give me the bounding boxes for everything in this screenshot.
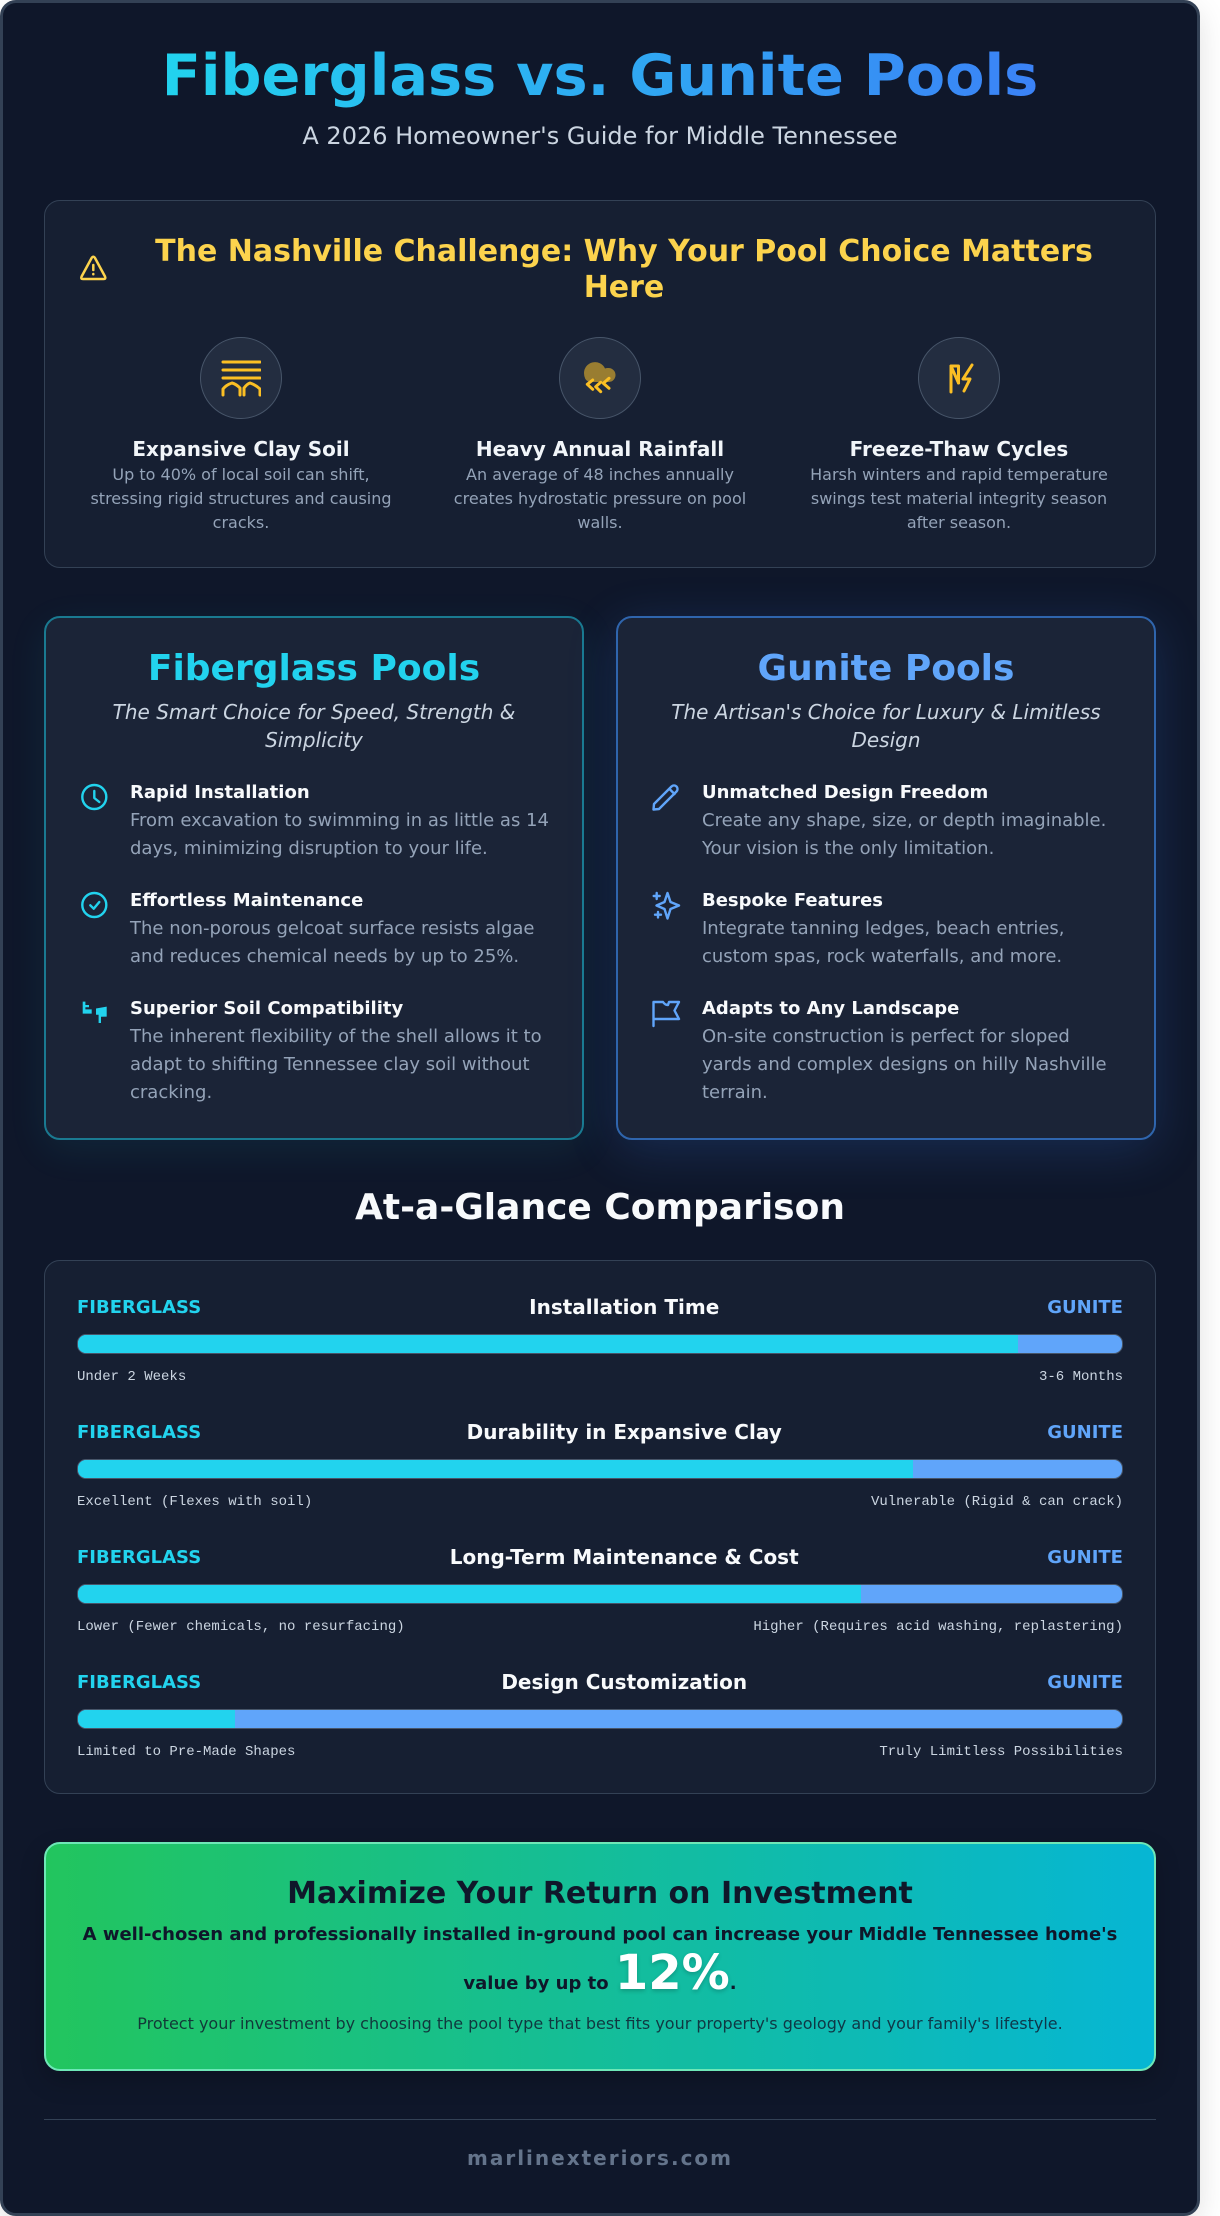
callout heading: Maximize Your Return on Investment <box>287 1876 913 1911</box>
feature: soil compatibility <box>82 998 542 1103</box>
icon: rain cloud <box>559 337 641 419</box>
icon: freeze-thaw <box>918 337 1000 419</box>
challenge heading: The Nashville Challenge: Why Your Pool Choice Matters Here <box>155 234 1093 305</box>
row labels: Design Customization <box>501 1670 747 1694</box>
row captions: Limited to Pre-Made Shapes <box>77 1744 295 1760</box>
text: freeze-thaw: Harsh winters and rapid temperature <box>810 465 1108 484</box>
text: clay soil: Up to 40% of local soil can shift, <box>112 465 370 484</box>
heading: freeze-thaw: Freeze-Thaw Cycles <box>850 437 1068 461</box>
row labels: Durability in Expansive Clay <box>467 1420 782 1444</box>
row captions <box>77 1369 1123 1385</box>
fiberglass heading: Fiberglass Pools <box>148 648 480 689</box>
feature text: terrain. <box>702 1082 768 1103</box>
row captions: Under 2 Weeks <box>77 1369 186 1385</box>
comparison heading: At-a-Glance Comparison <box>355 1187 845 1228</box>
row labels: FIBERGLASS <box>77 1672 201 1692</box>
bar: 75 percent fiberglass <box>77 1584 1123 1604</box>
row: maintenance and cost <box>77 1545 1123 1635</box>
feature title: Rapid Installation <box>130 782 310 803</box>
row labels <box>77 1420 1123 1444</box>
row labels <box>77 1295 1123 1319</box>
row labels: Installation Time <box>529 1295 719 1319</box>
icon: sparkles <box>652 892 680 920</box>
icon: clay soil <box>200 337 282 419</box>
footer website: marlinexteriors.com <box>467 2146 733 2170</box>
icon: split signs <box>82 1002 107 1023</box>
panel: fiberglass pools <box>44 616 584 1140</box>
heading: rainfall: Heavy Annual Rainfall <box>476 437 724 461</box>
panel: gunite pools <box>616 616 1156 1140</box>
callout: return on investment <box>44 1842 1156 2071</box>
feature: adapts to landscape <box>652 998 1107 1103</box>
panel: the Nashville challenge <box>44 200 1156 568</box>
bar: 15 percent fiberglass <box>77 1709 1123 1729</box>
gunite heading: Gunite Pools <box>758 648 1014 689</box>
fiberglass tagline: The Smart Choice for Speed, Strength & Simplicity <box>113 700 515 752</box>
feature title: Bespoke Features <box>702 890 883 911</box>
icon: pencil <box>652 784 679 811</box>
row labels: Long-Term Maintenance & Cost <box>450 1545 799 1569</box>
text: freeze-thaw: after season. <box>907 513 1011 532</box>
row captions: Higher (Requires acid washing, replastering) <box>753 1619 1123 1635</box>
challenge: expansive clay soil <box>90 337 392 532</box>
feature text: The non-porous gelcoat surface resists algae and reduces chemical needs by up to 25%. <box>130 918 535 967</box>
feature: bespoke features <box>652 890 1065 967</box>
row: durability <box>77 1420 1123 1510</box>
row labels: GUNITE <box>1047 1546 1123 1568</box>
gunite tagline: The Artisan's Choice for Luxury & Limitless Design <box>671 700 1101 752</box>
feature: design freedom <box>652 782 1106 859</box>
text: rainfall: An average of 48 inches annually <box>466 465 734 484</box>
bar: 90 percent fiberglass <box>77 1334 1123 1354</box>
callout statement with 12 percent <box>82 1924 1117 2001</box>
callout statement with 12 percent: value by up to 12%. <box>463 1945 737 2001</box>
feature: rapid installation <box>81 782 549 859</box>
bar: 80 percent fiberglass <box>77 1459 1123 1479</box>
row captions: 3-6 Months <box>1039 1369 1123 1385</box>
text: freeze-thaw: swings test material integrity season <box>811 489 1107 508</box>
row captions <box>77 1494 1123 1510</box>
row: design customization <box>77 1670 1123 1760</box>
text: rainfall <box>454 465 746 532</box>
text: clay soil: stressing rigid structures and causing <box>90 489 392 508</box>
row labels: FIBERGLASS <box>77 1422 201 1442</box>
row labels <box>77 1670 1123 1694</box>
feature text: From excavation to swimming in as little as 14 days, minimizing disruption to your life. <box>130 810 549 859</box>
row captions <box>77 1744 1123 1760</box>
feature text: Create any shape, size, or depth imaginable. Your vision is the only limitation. <box>702 810 1106 859</box>
feature text <box>702 1026 1107 1103</box>
feature title: Unmatched Design Freedom <box>702 782 988 803</box>
feature title: Effortless Maintenance <box>130 890 363 911</box>
row: installation time <box>77 1295 1123 1385</box>
row labels: GUNITE <box>1047 1422 1123 1442</box>
text: rainfall: creates hydrostatic pressure on pool <box>454 489 746 508</box>
feature text: Integrate tanning ledges, beach entries, custom spas, rock waterfalls, and more. <box>702 918 1065 967</box>
callout statement with 12 percent: A well-chosen and professionally installed in-ground pool can increase your Middle Tennessee home's <box>83 1924 1117 1945</box>
challenge: freeze-thaw <box>810 337 1108 532</box>
row captions: Lower (Fewer chemicals, no resurfacing) <box>77 1619 405 1635</box>
row captions: Excellent (Flexes with soil) <box>77 1494 312 1510</box>
heading: clay soil: Expansive Clay Soil <box>132 437 350 461</box>
icon: flag <box>652 1000 680 1028</box>
row labels: GUNITE <box>1047 1672 1123 1692</box>
row captions: Truly Limitless Possibilities <box>879 1744 1123 1760</box>
text: freeze-thaw <box>810 465 1108 532</box>
text: rainfall: walls. <box>577 513 623 532</box>
icon: check circle <box>81 892 108 918</box>
row labels: FIBERGLASS <box>77 1546 201 1568</box>
challenge: heavy rainfall <box>454 337 746 532</box>
text: clay soil <box>90 465 392 532</box>
feature text: On-site construction is perfect for sloped <box>702 1026 1070 1047</box>
text: clay soil: cracks. <box>213 513 269 532</box>
feature text: The inherent flexibility of the shell allows it to adapt to shifting Tennessee clay soil without cracking. <box>130 1026 542 1103</box>
row captions <box>77 1619 1123 1635</box>
title: Fiberglass vs. Gunite Pools <box>162 42 1038 109</box>
panel: comparison chart <box>44 1260 1156 1794</box>
row labels <box>77 1545 1123 1569</box>
icon: warning triangle <box>80 256 107 280</box>
row labels: GUNITE <box>1047 1296 1123 1318</box>
feature title: Superior Soil Compatibility <box>130 998 403 1019</box>
subtitle: A 2026 Homeowner's Guide for Middle Tennessee <box>302 122 898 150</box>
row captions: Vulnerable (Rigid & can crack) <box>871 1494 1123 1510</box>
icon: clock <box>81 784 108 810</box>
feature title: Adapts to Any Landscape <box>702 998 959 1019</box>
feature text: yards and complex designs on hilly Nashville <box>702 1054 1107 1075</box>
feature: effortless maintenance <box>81 890 535 967</box>
callout note: Protect your investment by choosing the pool type that best fits your property's geology and your family's lifestyle. <box>137 2014 1063 2033</box>
row labels: FIBERGLASS <box>77 1296 201 1318</box>
